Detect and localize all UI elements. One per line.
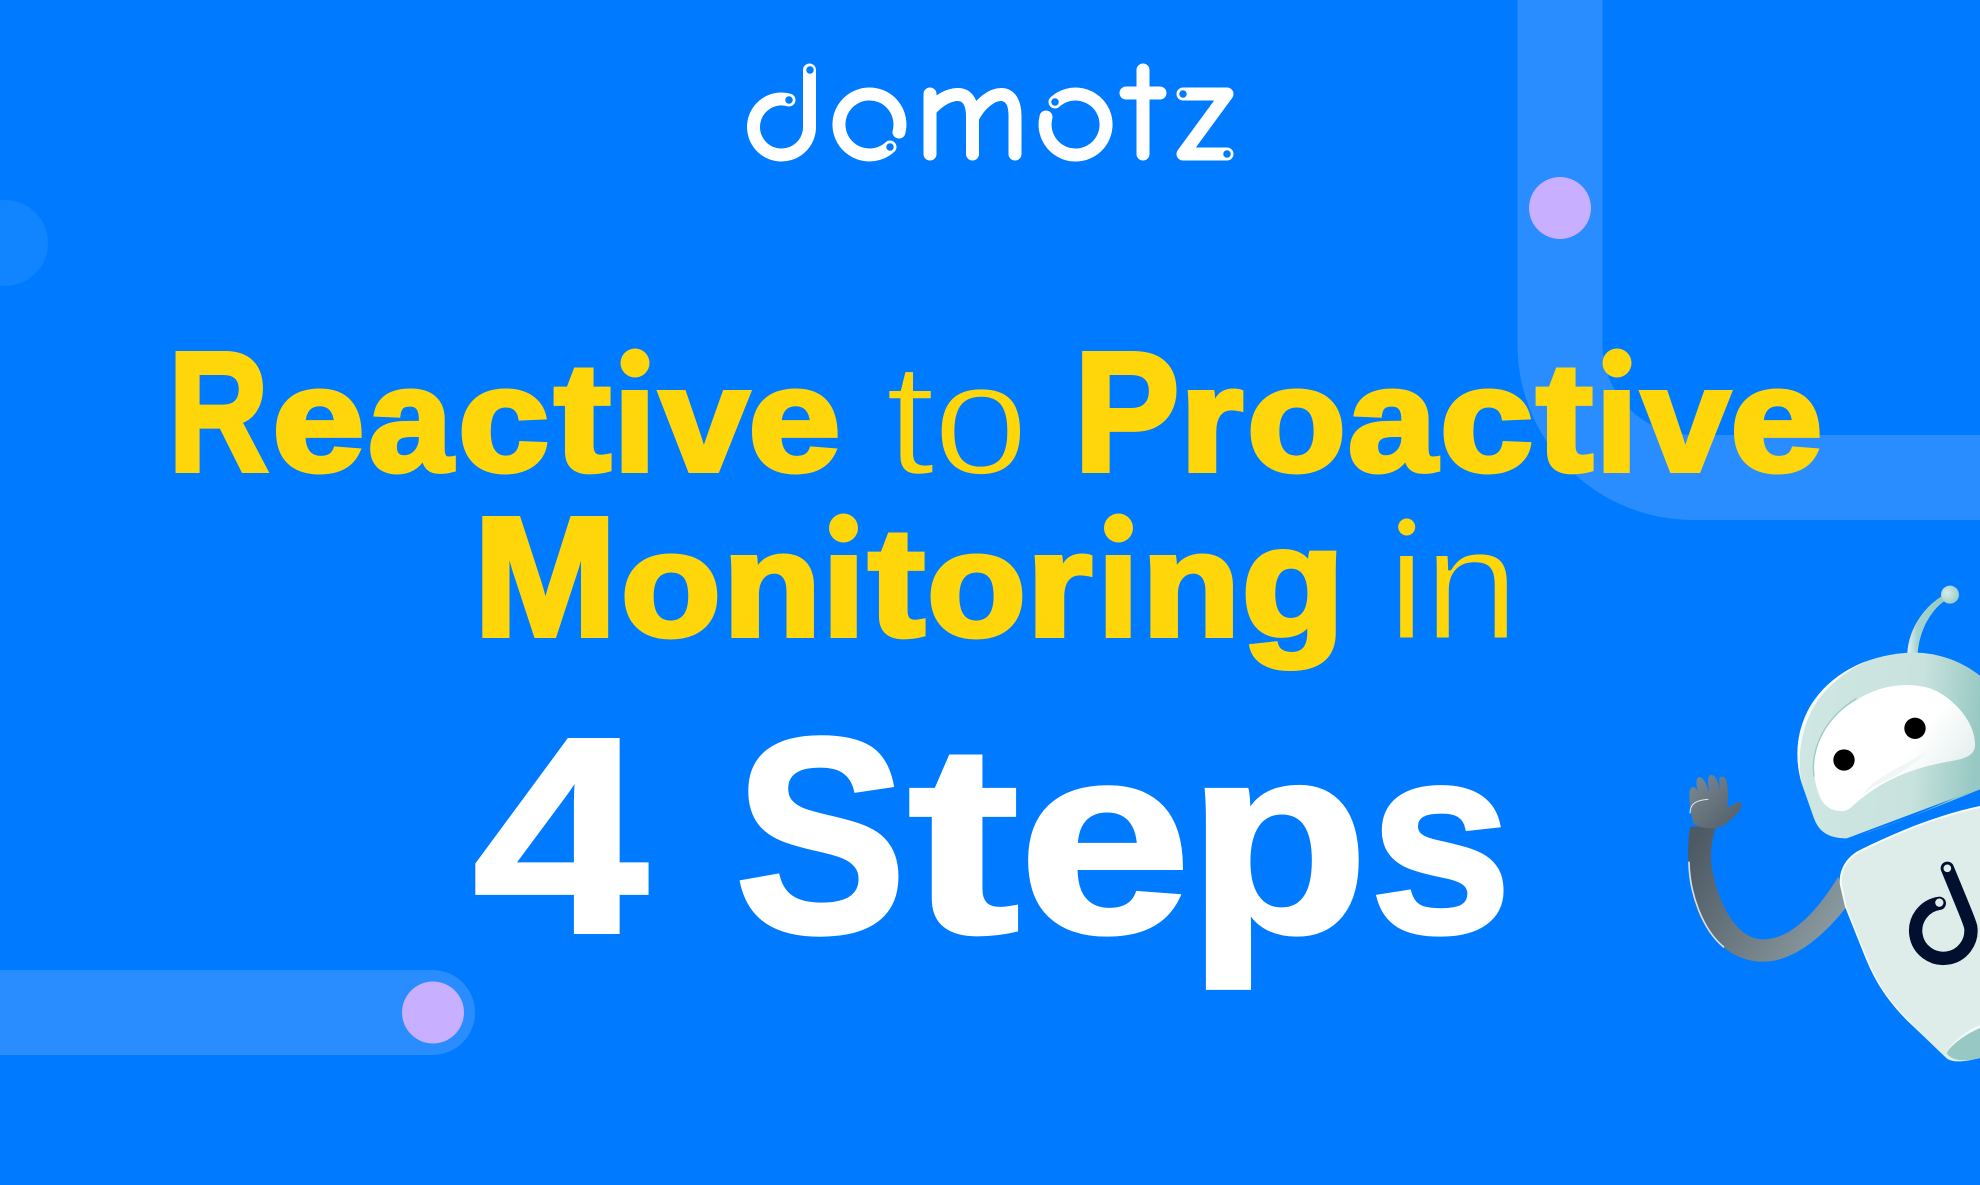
logo: domotz (754, 66, 1232, 158)
title line 2: n (1142, 502, 1240, 668)
title line 1: v (1642, 338, 1730, 502)
title line 1: t (885, 329, 935, 508)
title line 2: i (1386, 494, 1427, 673)
title line 1: r (1180, 338, 1243, 502)
title line 1: v (660, 338, 749, 502)
title line 1: i (1596, 338, 1638, 502)
title line 2: o (927, 502, 1026, 668)
robot arm (1688, 827, 1847, 962)
title line 2: r (1026, 502, 1092, 668)
robot mascot (1688, 586, 1980, 1061)
decorative faint circle left (0, 200, 48, 286)
title line 1: a (368, 338, 454, 502)
title line 3: 4 Steps: e (1018, 689, 1191, 990)
robot body (1840, 805, 1980, 1061)
robot head (1797, 653, 1980, 838)
title line 2: n (1423, 494, 1520, 673)
title line 1: o (1247, 338, 1346, 502)
title line 1: t (554, 332, 611, 504)
title line 1: a (1348, 338, 1439, 502)
title line 2 (482, 514, 1507, 671)
title line 3: 4 Steps: p (1187, 689, 1369, 991)
title line 2: i (1098, 502, 1138, 668)
title line 2: o (621, 502, 721, 668)
title line 1: P (1074, 318, 1180, 508)
title line 3: 4 Steps: 4 (473, 680, 650, 992)
robot hand (1689, 775, 1742, 828)
title line 1: o (933, 329, 1029, 508)
title line 1: R (168, 318, 268, 508)
title line 1: t (1536, 332, 1593, 504)
title line 1: i (614, 338, 656, 502)
title line 1 (176, 348, 1820, 474)
robot antenna (1907, 586, 1959, 653)
title line 2: i (822, 502, 865, 668)
decorative band bottom left (0, 970, 475, 1055)
title line 1: c (1440, 338, 1533, 502)
title line 2: g (1241, 496, 1345, 670)
robot chest logo (1916, 864, 1971, 958)
purple dot top right (1529, 177, 1591, 239)
title line 3: 4 Steps: s (1369, 689, 1512, 990)
title line 2: t (868, 496, 925, 668)
title line 2: n (723, 502, 821, 668)
title line 1: e (748, 338, 840, 502)
title line 2: M (473, 482, 617, 672)
title line 3: 4 Steps: S (734, 680, 907, 992)
title line 3: 4 Steps (473, 680, 1512, 992)
title line 1: c (458, 338, 549, 502)
title line 1: e (272, 338, 364, 502)
title line 3: 4 Steps: t (908, 689, 1020, 990)
decorative band top right (1560, 0, 1980, 478)
title line 1: e (1730, 338, 1822, 502)
purple dot bottom left (402, 982, 464, 1044)
